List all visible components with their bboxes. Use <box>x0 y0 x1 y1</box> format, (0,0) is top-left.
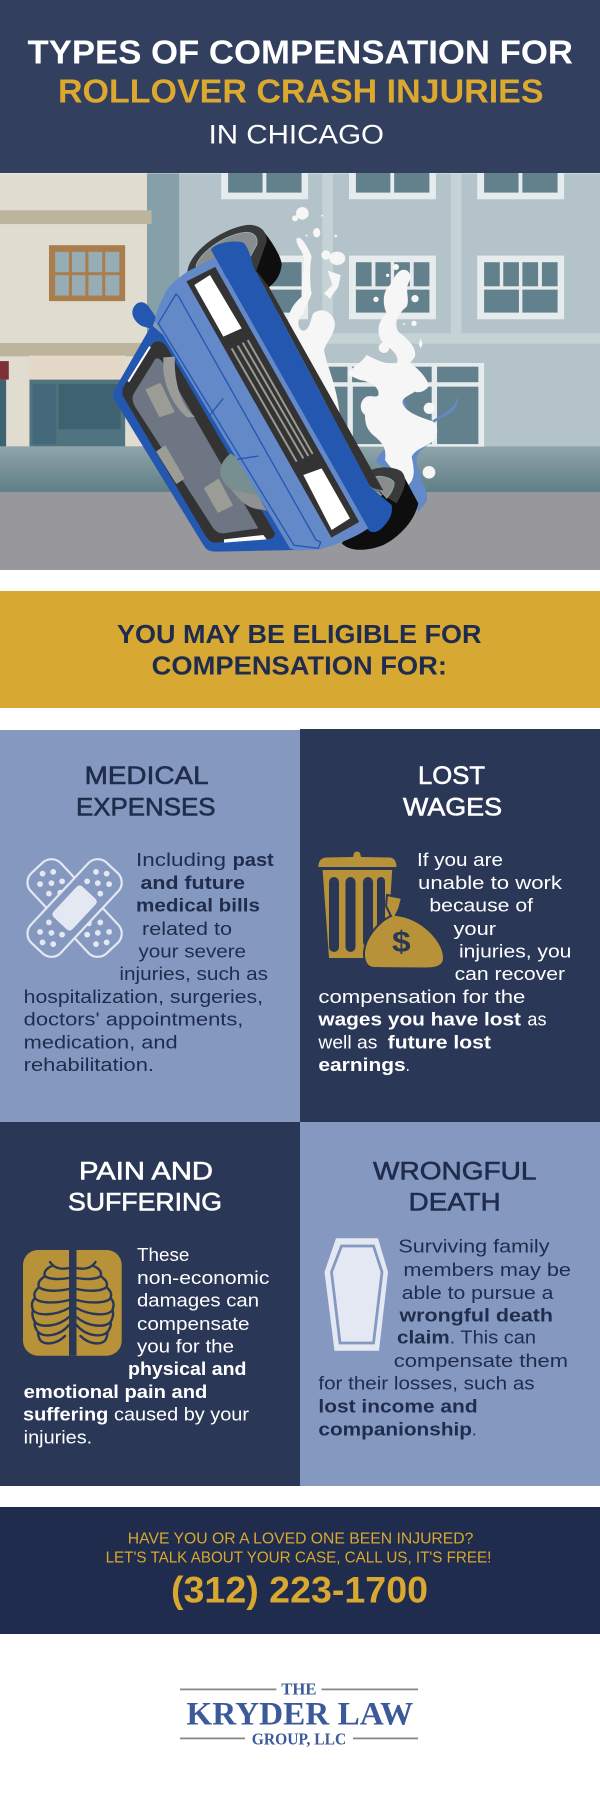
call to action text: LET'S TALK ABOUT YOUR CASE, CALL US, IT'S FREE! <box>106 1549 491 1566</box>
heading: lost wages: LOST <box>418 762 485 790</box>
body text: medical expenses: rehabilitation. <box>24 1054 154 1075</box>
panel: lost wages <box>300 729 600 1122</box>
heading: wrongful death: WRONGFUL <box>373 1157 537 1185</box>
body text: lost wages: If you are <box>417 849 503 870</box>
roof and cabin <box>113 325 297 552</box>
band heading: COMPENSATION FOR: <box>152 653 447 681</box>
body text: pain and suffering: physical and <box>128 1358 246 1379</box>
body text: lost wages: wages you have lost <box>317 1009 521 1030</box>
car side panel <box>211 241 392 532</box>
heading: pain and suffering: PAIN AND <box>79 1157 213 1185</box>
body text: medical expenses: injuries, such as <box>119 963 268 984</box>
heading: medical expenses: EXPENSES <box>76 794 216 822</box>
body text: wrongful death: . <box>472 1418 476 1439</box>
call to action panel <box>0 1507 600 1634</box>
car body <box>113 241 392 552</box>
body text: pain and suffering: damages can <box>137 1290 259 1311</box>
heading: medical expenses <box>76 762 216 822</box>
logo: The Kryder Law Group, LLC: THE <box>281 1680 316 1699</box>
body text: wrongful death: lost income and <box>318 1395 478 1416</box>
body text: lost wages: because of <box>429 895 534 916</box>
body text: pain and suffering: injuries. <box>24 1427 92 1448</box>
body text: medical expenses: hospitalization, surgeries, <box>24 986 263 1007</box>
heading: wrongful death: DEATH <box>409 1189 501 1217</box>
heading: lost wages <box>403 762 502 822</box>
heading: medical expenses: MEDICAL <box>85 762 209 790</box>
body text: pain and suffering: non-economic <box>137 1267 269 1288</box>
panel: pain and suffering <box>0 1122 300 1486</box>
body text: lost wages: . <box>406 1054 410 1075</box>
body text: lost wages: as <box>527 1009 546 1030</box>
body text: lost wages: unable to work <box>418 872 563 893</box>
body text: pain and suffering: you for the <box>137 1335 234 1356</box>
title line 2: ROLLOVER CRASH INJURIES <box>58 73 544 110</box>
heading: pain and suffering: SUFFERING <box>68 1189 222 1217</box>
body text: pain and suffering: suffering <box>23 1404 108 1425</box>
logo: The Kryder Law Group, LLC <box>180 1680 418 1748</box>
body text: pain and suffering: compensate <box>137 1313 250 1334</box>
body text: medical expenses: past <box>233 849 274 870</box>
beige building window <box>49 245 125 301</box>
body text: lost wages: compensation for the <box>318 986 525 1007</box>
wheels <box>187 225 418 550</box>
heading: lost wages: WAGES <box>403 794 502 822</box>
illustration: overturned car on city street <box>0 170 600 577</box>
body text: medical expenses: related to <box>142 918 232 939</box>
body text: pain and suffering: caused by your <box>114 1404 249 1425</box>
panel: wrongful death <box>300 1122 600 1486</box>
heading: pain and suffering <box>68 1157 222 1217</box>
phone number: (312) 223-1700 <box>171 1569 428 1610</box>
eligibility band <box>0 591 600 708</box>
body text: wrongful death: able to pursue a <box>402 1282 554 1303</box>
panel: medical expenses <box>0 730 300 1122</box>
heading: wrongful death <box>373 1157 537 1217</box>
header panel <box>0 0 600 173</box>
body text: wrongful death <box>318 1236 571 1439</box>
dark side strip <box>253 267 383 491</box>
body text: lost wages: future lost <box>388 1032 491 1053</box>
icon: trash can with money bag: $ <box>392 926 411 959</box>
body text: medical expenses: doctors' appointments, <box>24 1009 243 1030</box>
blue flame <box>376 397 458 512</box>
body text: wrongful death: wrongful death <box>398 1305 553 1326</box>
body text: lost wages: injuries, you <box>459 940 571 961</box>
body text: medical expenses: Including <box>136 849 226 870</box>
body text: lost wages: earnings <box>318 1054 406 1075</box>
call to action text: HAVE YOU OR A LOVED ONE BEEN INJURED? <box>128 1530 473 1547</box>
call to action text <box>106 1530 491 1566</box>
body text: wrongful death: Surviving family <box>398 1236 550 1257</box>
band heading <box>117 621 482 681</box>
title line 3: IN CHICAGO <box>209 120 384 150</box>
smoke plumes <box>288 207 437 485</box>
body text: lost wages <box>317 849 571 1075</box>
car and smoke <box>113 207 458 552</box>
body text: pain and suffering: emotional pain and <box>24 1381 207 1402</box>
logo: The Kryder Law Group, LLC: KRYDER LAW <box>186 1697 413 1733</box>
body text: medical expenses: medication, and <box>24 1032 178 1053</box>
grille slats <box>232 340 313 462</box>
body text: lost wages: well as <box>317 1032 377 1053</box>
body text: medical expenses: your severe <box>138 940 246 961</box>
body text: wrongful death: members may be <box>403 1259 571 1280</box>
band heading: YOU MAY BE ELIGIBLE FOR <box>117 621 482 649</box>
body text: wrongful death: companionship <box>318 1418 472 1439</box>
side mirror <box>132 302 156 329</box>
body text: medical expenses <box>24 849 274 1075</box>
body text: wrongful death: compensate them <box>394 1350 568 1371</box>
hood <box>155 257 368 551</box>
body text: wrongful death: for their losses, such as <box>318 1373 535 1394</box>
grille panel <box>187 268 358 537</box>
body text: pain and suffering: These <box>137 1244 189 1265</box>
body text: wrongful death: . This can <box>450 1327 536 1348</box>
title line 1: TYPES OF COMPENSATION FOR <box>28 34 573 71</box>
blue building windows <box>221 170 564 447</box>
logo: The Kryder Law Group, LLC: GROUP, LLC <box>252 1729 346 1748</box>
icon: crossed bandages <box>22 854 127 962</box>
icon: rib cage <box>23 1250 122 1356</box>
body text: pain and suffering <box>23 1244 269 1448</box>
icon: coffin <box>324 1238 388 1351</box>
body text: wrongful death: claim <box>397 1327 450 1348</box>
body text: lost wages: your <box>454 918 496 939</box>
body text: lost wages: can recover <box>455 963 565 984</box>
headlights <box>194 275 242 337</box>
street background <box>0 170 600 577</box>
body text: medical expenses: medical bills <box>136 895 260 916</box>
icon: trash can with money bag <box>318 852 444 968</box>
body text: medical expenses: and future <box>140 872 245 893</box>
